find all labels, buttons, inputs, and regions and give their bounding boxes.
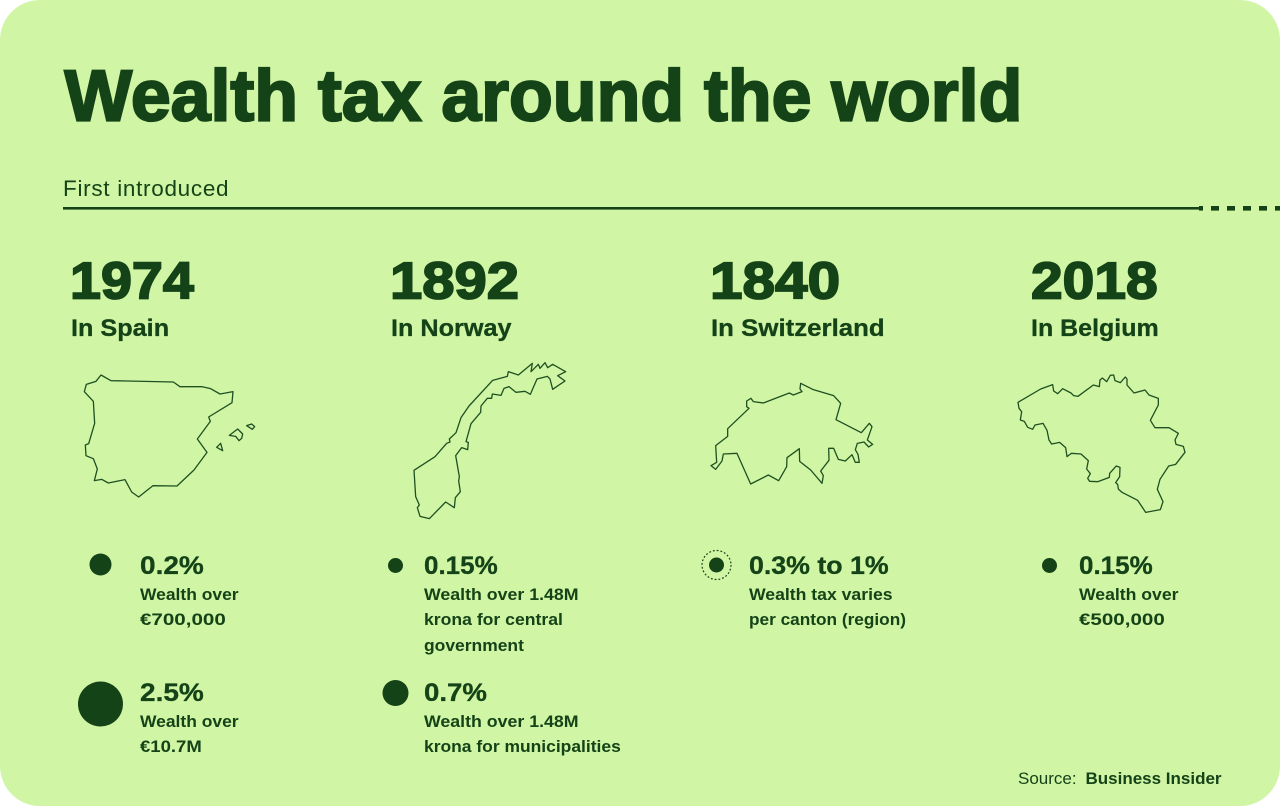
rate: 0.15%: Wealth over xyxy=(1079,584,1179,604)
rate: 0.15% central: 0.15% xyxy=(424,552,498,580)
rate: 0.3% to 1%: per canton (region) xyxy=(749,610,906,629)
rate: 0.2%: €700,000 xyxy=(140,610,226,629)
rate: 0.7% municipalities: 0.7% xyxy=(424,678,487,707)
rate: 0.15% central: government xyxy=(424,635,524,655)
panel: Switzerland xyxy=(702,252,906,629)
rate: 0.3% to 1%: 0.3% to 1% xyxy=(749,553,889,580)
rate: 0.3% to 1% xyxy=(702,550,906,629)
source xyxy=(1018,769,1222,788)
timeline label: First introduced xyxy=(63,176,229,201)
rate: 0.15%: €500,000 xyxy=(1079,610,1165,629)
map: Spain xyxy=(84,375,255,497)
timeline axis xyxy=(63,206,1280,211)
rate: 0.15% central: krona for central xyxy=(424,609,563,629)
panel: Norway xyxy=(382,251,621,756)
rate: 0.15% central xyxy=(388,552,579,655)
rate: 0.2%: Wealth over xyxy=(140,584,239,604)
rate: 0.2% xyxy=(90,551,239,629)
rate: 2.5%: Wealth over xyxy=(140,711,239,731)
rate: 0.2%: 0.2% xyxy=(140,551,204,580)
panel: Spain xyxy=(70,252,255,756)
year: 1974: 1974 xyxy=(70,252,194,310)
country: Belgium: In Belgium xyxy=(1031,315,1159,342)
country: Switzerland: In Switzerland xyxy=(711,315,885,342)
rate: 0.7% municipalities: Wealth over 1.48M xyxy=(424,711,579,731)
country: Spain: In Spain xyxy=(71,314,169,342)
year: 1840: 1840 xyxy=(710,252,840,310)
rate: 2.5%: €10.7M xyxy=(140,737,202,756)
panel: Belgium xyxy=(1018,252,1185,629)
title: Wealth tax around the world xyxy=(64,56,1022,137)
rate: 0.15% xyxy=(1042,552,1179,629)
rate: 0.15% central: Wealth over 1.48M xyxy=(424,584,579,604)
source: Source: xyxy=(1018,769,1077,788)
rate: 2.5%: 2.5% xyxy=(140,678,204,707)
map: Switzerland xyxy=(711,383,873,484)
map: Norway xyxy=(414,363,566,519)
rate: 0.7% municipalities: krona for municipalities xyxy=(424,736,621,756)
year: 2018: 2018 xyxy=(1031,252,1158,310)
country: Norway: In Norway xyxy=(391,314,512,342)
rate: 2.5% xyxy=(78,678,239,756)
rate: 0.15%: 0.15% xyxy=(1079,552,1153,580)
map: Belgium xyxy=(1018,375,1185,512)
source: Business Insider xyxy=(1086,769,1222,788)
rate: 0.7% municipalities xyxy=(382,678,621,756)
rate: 0.3% to 1%: Wealth tax varies xyxy=(749,584,893,604)
year: 1892: 1892 xyxy=(390,251,519,310)
